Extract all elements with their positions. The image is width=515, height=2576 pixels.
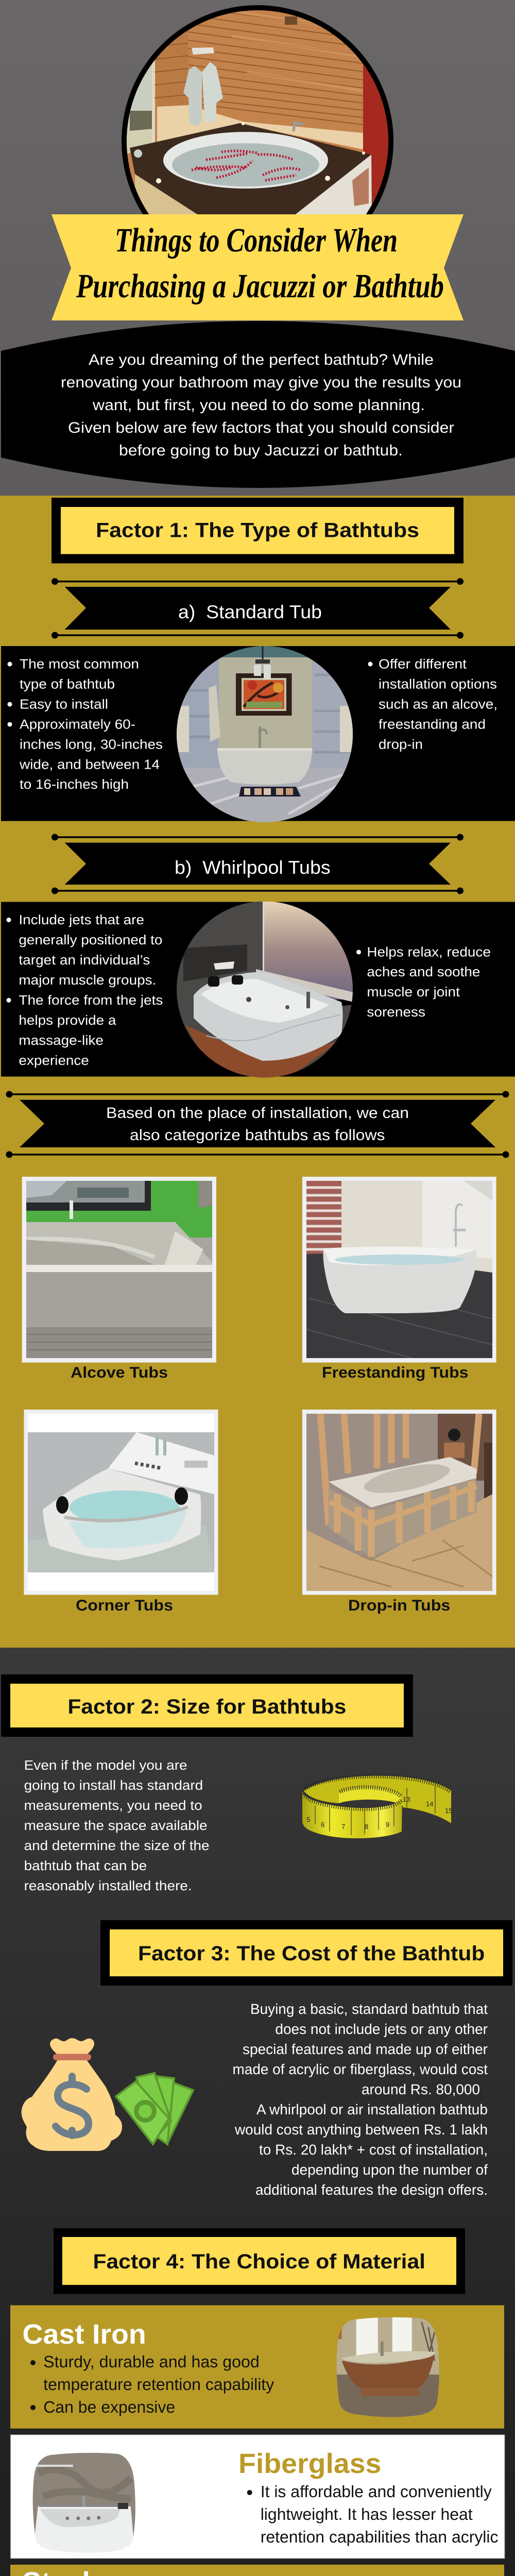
- heading: factor 2: Factor 2: Size for Bathtubs: [67, 1696, 346, 1718]
- list: standard tub right: Offer different: [379, 656, 467, 672]
- heading: factor 2: [1, 1674, 413, 1737]
- text: cost paragraph: to Rs. 20 lakh* + cost of installation,: [259, 2142, 488, 2158]
- icon: measuring tape: 13: [403, 1795, 410, 1803]
- list: whirlpool right: aches and soothe: [367, 964, 480, 979]
- intro panel: [1, 321, 515, 488]
- text: cost paragraph: around Rs. 80,000: [362, 2081, 480, 2097]
- icon: money bag: [22, 2038, 122, 2151]
- card: drop-in tubs: [302, 1410, 496, 1614]
- intro text: want, but first, you need to do some planning.: [92, 397, 425, 414]
- list: fiberglass: It is affordable and conveniently: [261, 2482, 492, 2501]
- label: Alcove Tubs: [71, 1364, 168, 1381]
- list: whirlpool right: Helps relax, reduce: [367, 944, 491, 959]
- intro text: before going to buy Jacuzzi or bathtub.: [119, 442, 403, 459]
- list: standard tub left: inches long, 30-inches: [20, 736, 163, 752]
- panel: fiberglass: [10, 2435, 505, 2558]
- list: whirlpool left: major muscle groups.: [19, 972, 156, 988]
- panel: cast iron: [10, 2305, 504, 2429]
- heading: factor 3: Factor 3: The Cost of the Bathtub: [138, 1942, 485, 1965]
- list: standard tub left: to 16-inches high: [20, 776, 129, 792]
- list: whirlpool left: experience: [19, 1053, 89, 1068]
- icon: measuring tape: 6: [321, 1821, 324, 1828]
- intro text: Are you dreaming of the perfect bathtub? While: [89, 351, 434, 368]
- text: cost paragraph: depending upon the number of: [291, 2162, 488, 2178]
- list: whirlpool left: target an individual’s: [19, 952, 150, 968]
- text: size paragraph: [24, 1757, 210, 1893]
- text: size paragraph: measure the space available: [24, 1818, 208, 1833]
- photo: fiberglass tub: [32, 2451, 137, 2554]
- text: cost paragraph: special features and made up of either: [243, 2041, 488, 2057]
- icon: measuring tape: 15: [445, 1807, 452, 1815]
- list: standard tub right: installation options: [379, 676, 497, 691]
- ribbon: standard tub: a) Standard Tub: [178, 601, 322, 622]
- text: size paragraph: and determine the size of the: [24, 1838, 210, 1853]
- icon: measuring tape: 5: [306, 1816, 310, 1823]
- list: standard tub left: type of bathtub: [20, 676, 115, 691]
- list: cast iron: Sturdy, durable and has good: [43, 2352, 260, 2371]
- panel: fiberglass: Fiberglass: [238, 2448, 381, 2479]
- card: freestanding tubs: [302, 1177, 496, 1381]
- icon: measuring tape: 8: [365, 1823, 368, 1831]
- intro text: Given below are few factors that you should consider: [68, 419, 454, 436]
- text: cost paragraph: Buying a basic, standard bathtub that: [250, 2001, 488, 2017]
- list: whirlpool left: [6, 912, 163, 1068]
- icon: measuring tape: [302, 1776, 452, 1838]
- list: whirlpool right: muscle or joint: [367, 984, 460, 999]
- intro text: renovating your bathroom may give you the results you: [61, 374, 461, 391]
- list: fiberglass: [247, 2482, 499, 2546]
- card: corner tubs: [24, 1410, 218, 1614]
- label: Drop-in Tubs: [348, 1597, 450, 1614]
- photo: standard tub: [177, 646, 353, 824]
- list: fiberglass: lightweight. It has lesser heat: [261, 2505, 473, 2523]
- ribbon: whirlpool tubs: b) Whirlpool Tubs: [175, 857, 331, 878]
- heading: factor 3: [100, 1920, 512, 1986]
- text: cost paragraph: made of acrylic or fiberglass, would cost: [233, 2061, 488, 2077]
- title text: [76, 222, 444, 305]
- ribbon: whirlpool tubs: [52, 834, 464, 894]
- ribbon: place of installation: Based on the place of installation, we can: [106, 1105, 409, 1122]
- heading: factor 1: [52, 498, 464, 564]
- text: size paragraph: measurements, you need to: [24, 1798, 202, 1813]
- title text: Things to Consider When: [115, 222, 398, 259]
- list: whirlpool left: Include jets that are: [19, 912, 144, 927]
- icon: measuring tape: 7: [341, 1823, 345, 1831]
- gold section: factor 1: [0, 496, 515, 1648]
- text: cost paragraph: does not include jets or any other: [275, 2021, 488, 2037]
- list: standard tub right: freestanding and: [379, 716, 486, 732]
- heading: factor 4: Factor 4: The Choice of Material: [93, 2250, 425, 2273]
- text: size paragraph: going to install has standard: [24, 1777, 203, 1793]
- list: cast iron: Can be expensive: [43, 2398, 175, 2416]
- panel: whirlpool tubs: [1, 902, 515, 1078]
- heading: factor 1: Factor 1: The Type of Bathtubs: [96, 519, 419, 542]
- photo: corner tub: [28, 1432, 214, 1572]
- list: standard tub right: [368, 656, 497, 752]
- list: fiberglass: retention capabilities than acrylic: [261, 2528, 499, 2546]
- panel: steel: [10, 2565, 504, 2576]
- heading: factor 4: [54, 2228, 465, 2294]
- text: cost paragraph: would cost anything between Rs. 1 lakh: [234, 2122, 488, 2138]
- photo: drop-in tub: [306, 1414, 492, 1591]
- card: alcove tubs: [22, 1177, 216, 1381]
- ribbon: place of installation: also categorize bathtubs as follows: [130, 1127, 385, 1144]
- photo: whirlpool tub: [177, 902, 353, 1078]
- hero photo: jacuzzi in circle: [122, 5, 393, 214]
- label: Corner Tubs: [76, 1597, 173, 1614]
- panel: cast iron: Cast Iron: [22, 2319, 146, 2350]
- list: whirlpool left: generally positioned to: [19, 932, 162, 947]
- label: Freestanding Tubs: [322, 1364, 469, 1381]
- text: cost paragraph: additional features the design offers.: [255, 2182, 488, 2198]
- list: whirlpool right: [356, 944, 491, 1020]
- list: cast iron: temperature retention capability: [43, 2375, 274, 2394]
- intro text: [61, 351, 461, 459]
- list: cast iron: [30, 2352, 274, 2416]
- photo: alcove tub: [26, 1181, 212, 1358]
- list: whirlpool right: soreness: [367, 1004, 425, 1020]
- text: size paragraph: bathtub that can be: [24, 1858, 147, 1873]
- list: standard tub left: The most common: [20, 656, 139, 672]
- text: cost paragraph: [233, 2001, 488, 2198]
- list: standard tub right: such as an alcove,: [379, 697, 497, 712]
- list: standard tub left: Approximately 60-: [20, 716, 135, 732]
- photo: freestanding tub: [306, 1181, 492, 1358]
- text: size paragraph: Even if the model you are: [24, 1757, 187, 1773]
- list: standard tub left: wide, and between 14: [19, 756, 160, 772]
- list: standard tub left: [7, 656, 163, 792]
- panel: standard tub: [1, 646, 515, 824]
- text: cost paragraph: A whirlpool or air installation bathtub: [256, 2102, 488, 2117]
- list: standard tub left: Easy to install: [20, 697, 108, 712]
- photo: cast iron tub: [336, 2316, 441, 2419]
- list: whirlpool left: massage-like: [19, 1032, 104, 1048]
- icon: measuring tape: 9: [386, 1821, 389, 1828]
- icon: measuring tape: 14: [426, 1800, 433, 1808]
- title ribbon: [52, 214, 464, 320]
- list: whirlpool left: The force from the jets: [19, 992, 163, 1008]
- ribbon: place of installation: [6, 1091, 509, 1158]
- list: whirlpool left: helps provide a: [19, 1012, 116, 1028]
- list: standard tub right: drop-in: [379, 736, 423, 752]
- ribbon: standard tub: [52, 578, 464, 639]
- text: size paragraph: reasonably installed there.: [24, 1878, 192, 1893]
- icon: banknotes: [116, 2073, 193, 2144]
